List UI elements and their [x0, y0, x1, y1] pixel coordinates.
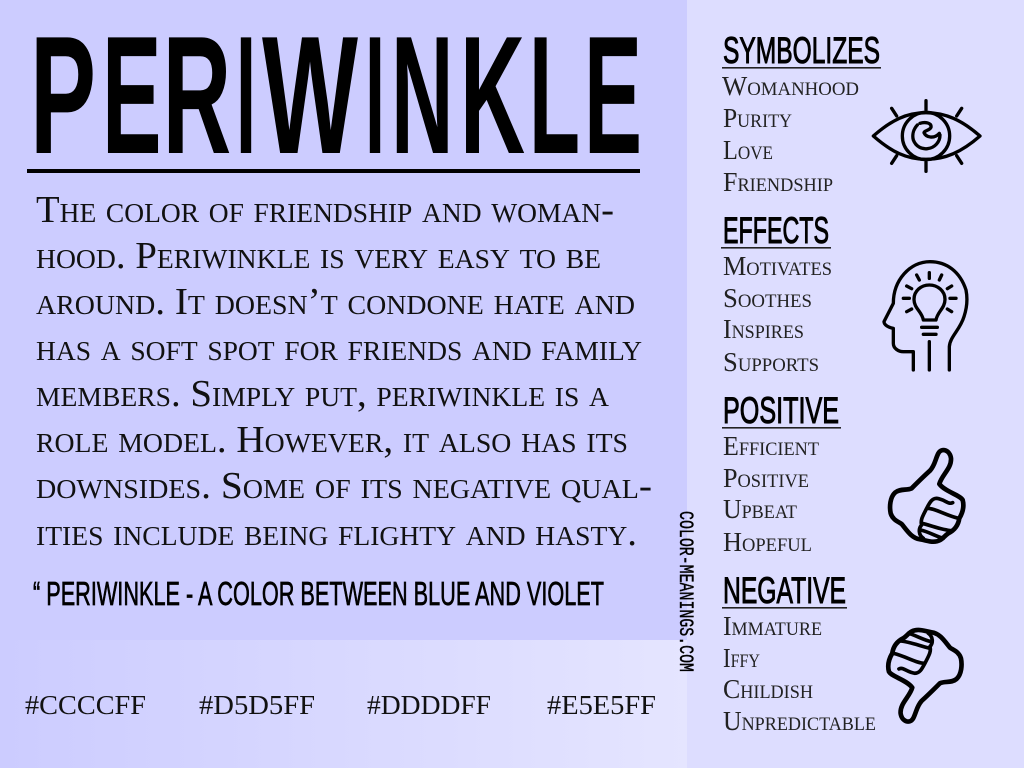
list: symbolizes: Love [723, 135, 773, 165]
icon: head with lightbulb [884, 262, 967, 370]
text block: description [36, 189, 652, 554]
swatch labels: #CCCCFF [25, 690, 146, 720]
text block: description: members. Simply put, periwinkle is a [36, 373, 610, 415]
list: effects: Motivates [723, 251, 832, 281]
text block: description: ities include being flighty and hasty. [36, 512, 637, 554]
title: K [460, 1, 525, 189]
panel: sidebar background [687, 0, 1024, 768]
list: positive: Hopeful [723, 527, 812, 557]
panel: positive [722, 390, 841, 557]
heading: symbolizes: SYMBOLIZES [723, 30, 880, 71]
title: W [262, 1, 358, 189]
list: positive [723, 431, 819, 557]
list: negative: Childish [723, 674, 813, 704]
heading: effects: EFFECTS [723, 210, 829, 251]
text block: description: has a soft spot for friends and family [36, 327, 642, 369]
title: I [236, 1, 256, 189]
heading: positive: POSITIVE [723, 390, 839, 431]
title [30, 1, 642, 189]
swatch labels: #DDDDFF [367, 690, 491, 720]
list: negative [723, 611, 876, 736]
icon: thumbs up [890, 450, 963, 542]
panel: main background [0, 0, 687, 640]
swatch labels: #D5D5FF [199, 690, 315, 720]
swatch labels: #E5E5FF [547, 690, 656, 720]
text block: description: hood. Periwinkle is very easy to be [36, 235, 601, 277]
callout: quote: “ PERIWINKLE - A COLOR BETWEEN BLUE AND VIOLET [33, 575, 604, 612]
list: symbolizes [722, 71, 859, 197]
list: symbolizes: Womanhood [722, 71, 859, 101]
title: E [584, 1, 642, 189]
title: P [30, 1, 96, 189]
list: positive: Upbeat [723, 494, 797, 524]
swatch labels [25, 690, 656, 720]
heading: negative: NEGATIVE [723, 570, 846, 611]
text block: description: role model. However, it also has its [36, 419, 628, 461]
list: symbolizes: Friendship [723, 167, 833, 197]
text block: description: The color of friendship and woman- [36, 189, 614, 231]
title underline [27, 169, 640, 173]
panel: symbolizes [722, 30, 881, 197]
list: symbolizes: Purity [723, 103, 792, 133]
title: E [102, 1, 162, 189]
icon: eye [873, 101, 980, 171]
title: N [391, 1, 454, 189]
text block: description: downsides. Some of its negative qual- [36, 465, 652, 507]
title: I [365, 1, 385, 189]
title: R [163, 1, 231, 189]
list: effects [723, 251, 832, 377]
list: positive: Positive [723, 463, 809, 493]
panel: colour swatch gradient strip [0, 640, 687, 768]
title: L [529, 1, 580, 189]
text block: description: around. It doesn’t condone hate and [36, 281, 635, 323]
list: effects: Supports [723, 347, 819, 377]
list: positive: Efficient [723, 431, 819, 461]
vertical source credit: COLOR-MEANINGS.COM [673, 511, 696, 672]
list: effects: Inspires [723, 314, 804, 344]
icon: thumbs down [888, 630, 962, 722]
panel: effects [721, 210, 832, 377]
panel: negative [722, 570, 876, 736]
list: negative: Unpredictable [723, 706, 876, 736]
list: negative: Immature [723, 611, 822, 641]
list: negative: Iffy [723, 643, 760, 673]
list: effects: Soothes [723, 283, 812, 313]
